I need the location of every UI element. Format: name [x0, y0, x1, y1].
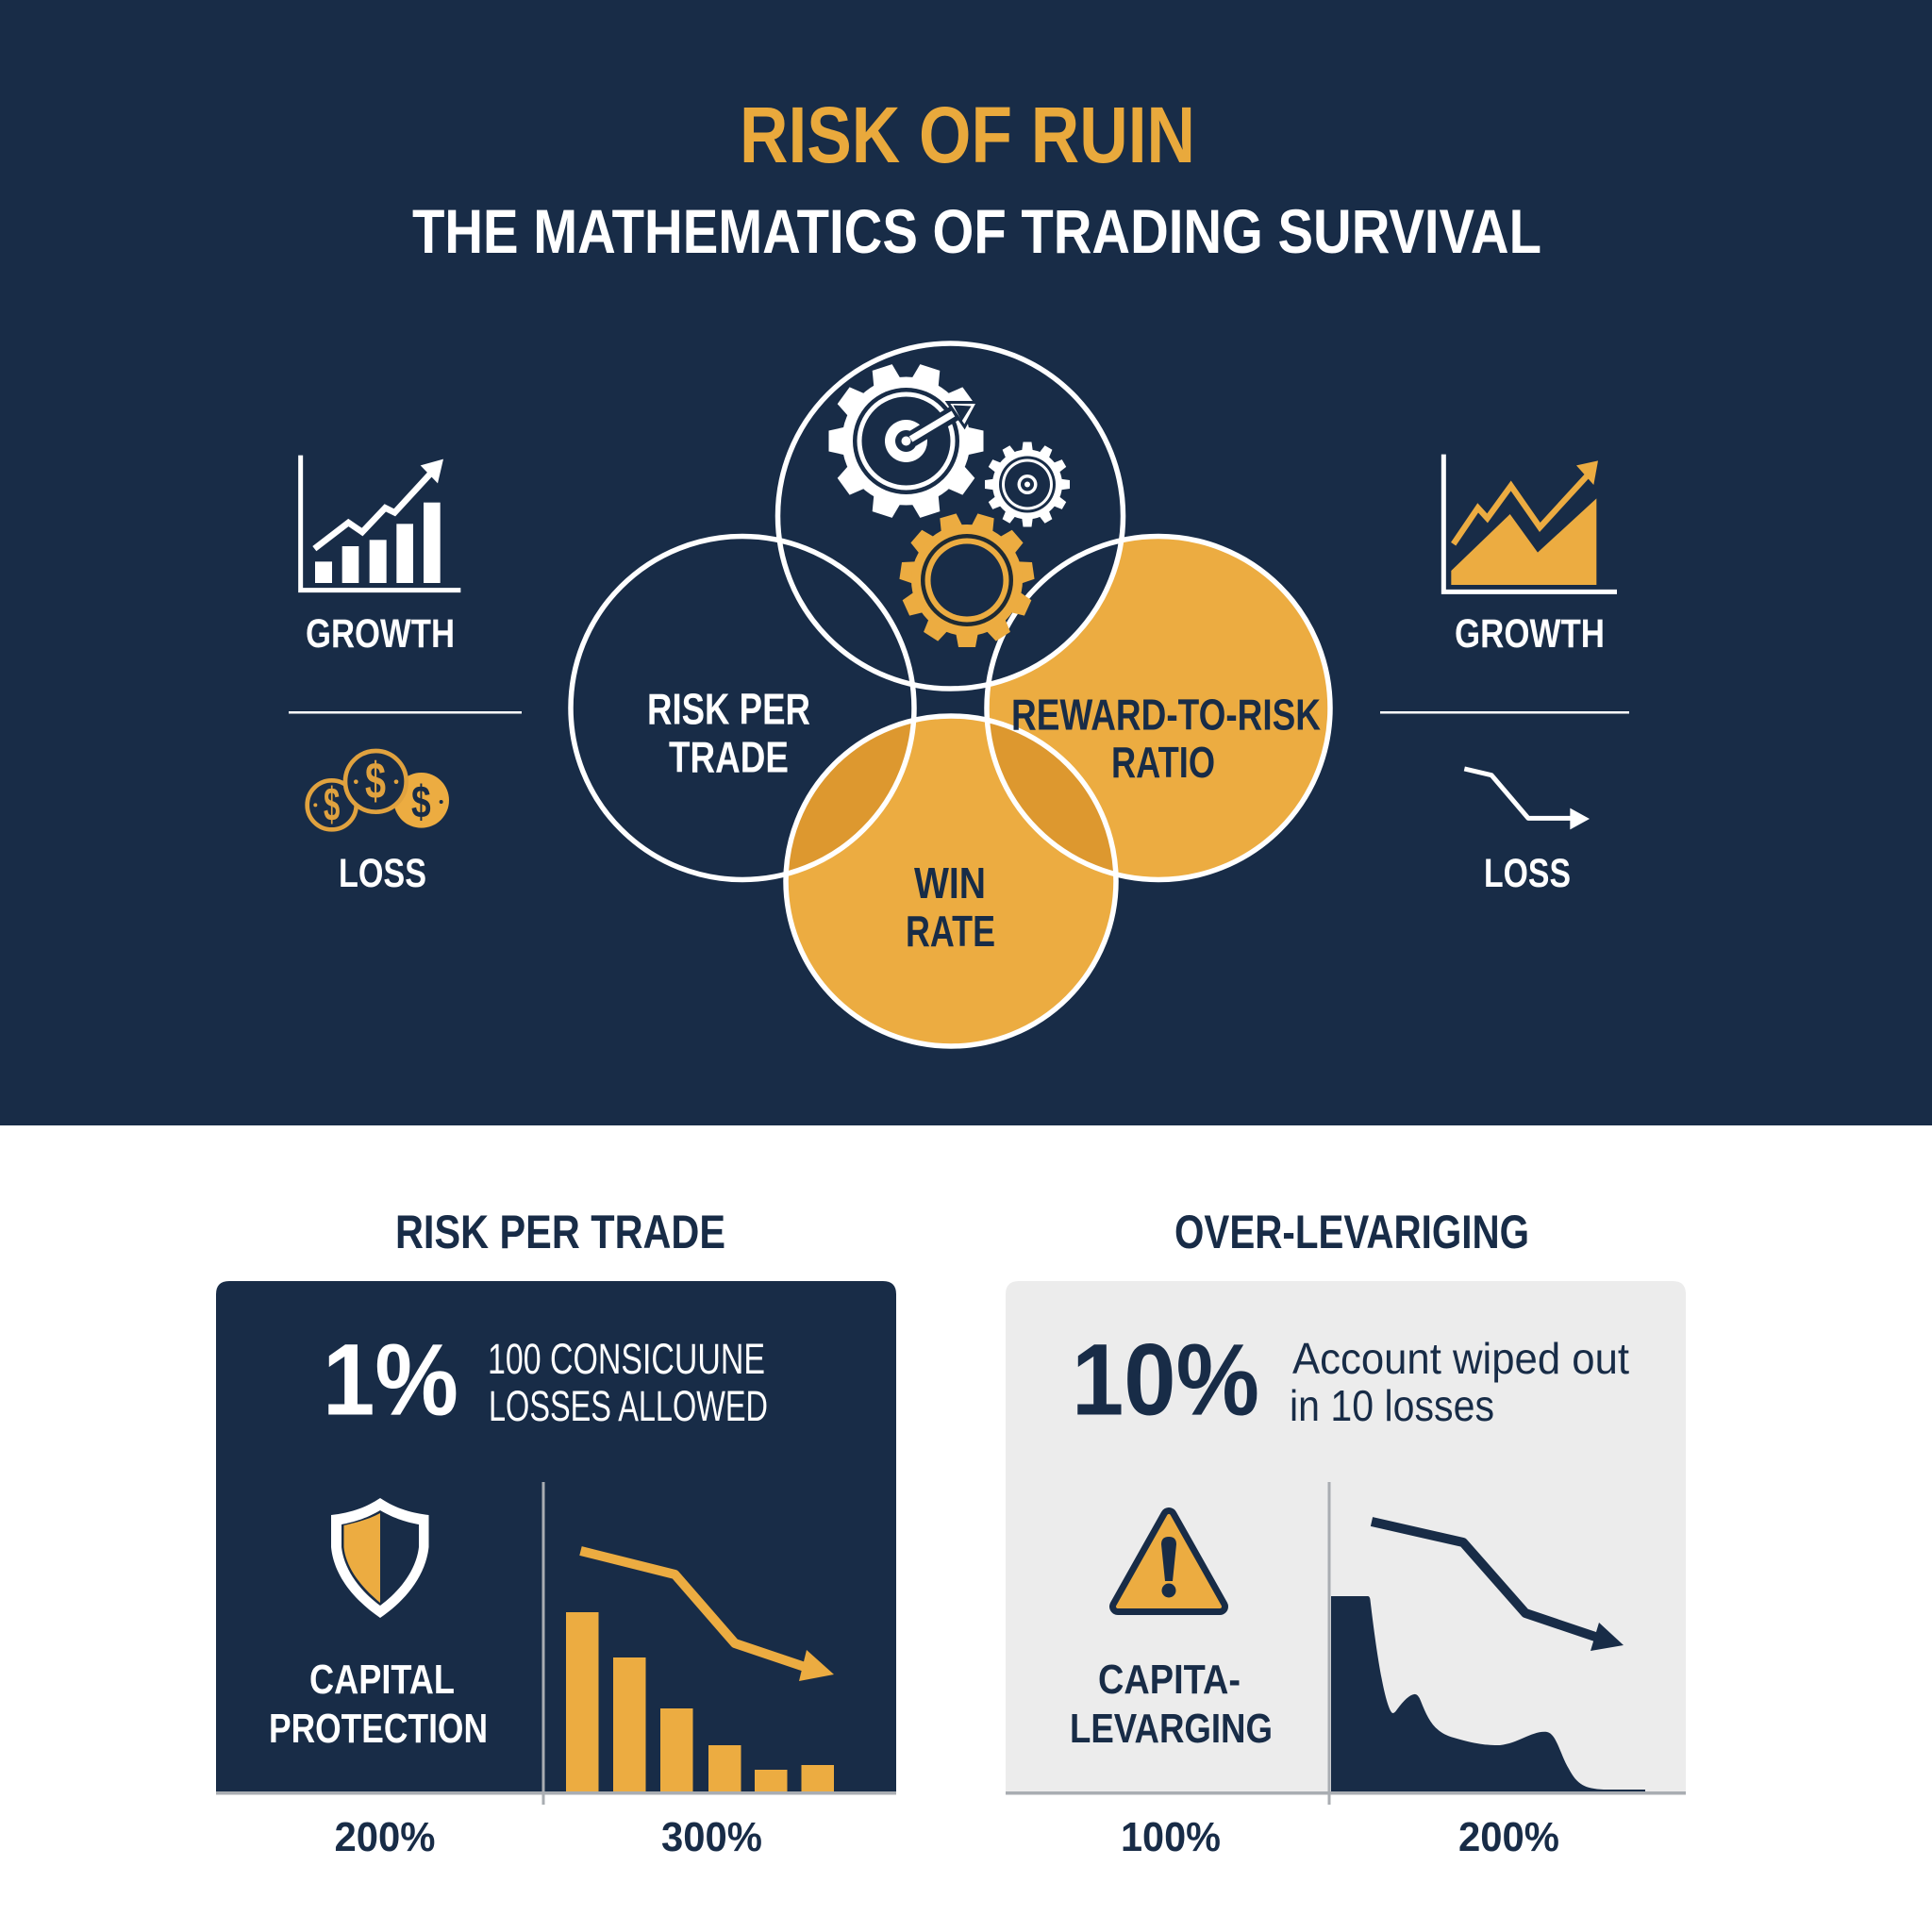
circle outlines: [571, 343, 1330, 1046]
stat description: in 10 losses: [1290, 1381, 1494, 1430]
icon: gold gear: [899, 513, 1035, 647]
overlap: win rate and reward: [991, 724, 1113, 871]
stat description: Account wiped out: [1292, 1334, 1629, 1383]
label: win rate: [906, 858, 995, 956]
circle: reward-to-risk: [987, 536, 1330, 879]
panel: dark header: [0, 0, 1932, 1125]
label: reward-to-risk ratio: REWARD-TO-RISK: [1011, 691, 1321, 740]
subtitle: THE MATHEMATICS OF TRADING SURVIVAL: [412, 196, 1541, 266]
divider left: [289, 711, 522, 713]
stat description: [488, 1335, 768, 1430]
label: 100%: 100%: [1121, 1814, 1221, 1860]
venn diagram: [571, 343, 1330, 1046]
heading: over-leveraging: OVER-LEVARIGING: [1174, 1206, 1529, 1258]
icon: large white gear with target: [828, 363, 983, 519]
label: capita-levarging: LEVARGING: [1070, 1706, 1273, 1752]
label: capital protection: CAPITAL: [309, 1657, 455, 1703]
icon: coins: $: [324, 778, 340, 831]
area chart: [1331, 1596, 1645, 1792]
overlap: win rate and risk: [789, 724, 911, 871]
divider right: [1380, 711, 1629, 713]
circle: win rate: [786, 716, 1116, 1046]
label: 200% right: 200%: [1458, 1814, 1559, 1860]
label: 300%: 300%: [661, 1814, 762, 1860]
label: reward-to-risk ratio: [1011, 691, 1321, 787]
title: RISK OF RUIN: [740, 91, 1195, 179]
bar chart: [566, 1612, 834, 1792]
stat description: 100 CONSICUUNE: [488, 1335, 765, 1383]
heading: risk per trade: RISK PER TRADE: [395, 1206, 725, 1258]
label: loss right: LOSS: [1484, 851, 1571, 896]
stat description: [1290, 1334, 1629, 1430]
label: capita-levarging: [1070, 1657, 1273, 1752]
icon: growth bar chart: [301, 456, 460, 591]
icon: coins: $: [411, 777, 431, 828]
icon: shield: [331, 1498, 428, 1618]
panel: risk per trade: [216, 1281, 896, 1792]
stat description: LOSSES ALLOWED: [489, 1382, 768, 1430]
icon: warning triangle: [1118, 1516, 1220, 1607]
stat: 10%: 10%: [1072, 1323, 1259, 1436]
icon: small white gear: [985, 441, 1070, 526]
top circle interior over reward circle: [777, 343, 1123, 689]
label: risk per trade: TRADE: [669, 732, 789, 781]
label: loss left: LOSS: [339, 851, 426, 896]
arrow: navy decline: [1372, 1522, 1624, 1651]
label: capital protection: [269, 1657, 488, 1752]
label: capita-levarging: CAPITA-: [1098, 1657, 1241, 1703]
icon: growth area chart: [1443, 455, 1617, 591]
label: win rate: RATE: [906, 907, 995, 956]
icon: loss arrow: [1464, 769, 1590, 829]
icon: coins: $: [365, 752, 386, 810]
axis: left panel: [216, 1482, 896, 1805]
label: 200% left: 200%: [334, 1814, 436, 1860]
label: growth right: GROWTH: [1455, 611, 1605, 657]
axis: right panel: [1006, 1482, 1686, 1805]
arrow: gold decline: [581, 1551, 834, 1681]
stat: 1%: 1%: [323, 1323, 458, 1436]
icon: coins: [308, 751, 449, 831]
label: risk per trade: RISK PER: [647, 685, 810, 734]
label: capital protection: PROTECTION: [269, 1706, 488, 1752]
label: win rate: WIN: [914, 858, 986, 908]
label: growth left: GROWTH: [306, 611, 455, 657]
label: risk per trade: [647, 685, 810, 781]
label: reward-to-risk ratio: RATIO: [1111, 738, 1215, 787]
panel: over-leveraging: [1006, 1281, 1686, 1792]
